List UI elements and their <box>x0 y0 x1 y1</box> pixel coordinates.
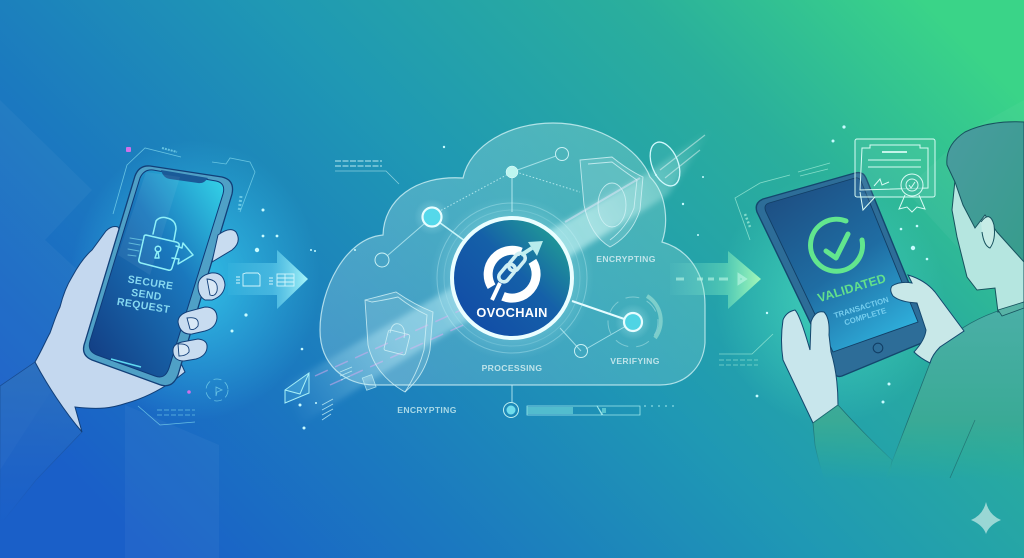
icon: certificate <box>855 139 935 212</box>
text: cloud labels: ENCRYPTING <box>596 254 656 264</box>
magenta accent dots <box>126 147 191 394</box>
home indicator <box>111 359 141 367</box>
panel: tablet <box>756 173 964 558</box>
fingernails <box>178 279 217 356</box>
icon: document <box>269 274 294 286</box>
collar <box>998 302 1024 316</box>
icon: right shield <box>580 157 643 247</box>
data beam <box>285 128 712 425</box>
HUD text lines above cloud <box>335 161 399 184</box>
icon: envelope <box>285 373 309 403</box>
node: left small <box>375 253 389 267</box>
node: verifying <box>608 296 661 347</box>
node: lower small <box>574 344 588 358</box>
sparkles <box>230 125 928 430</box>
node: top right small <box>556 148 568 160</box>
phone notch <box>161 170 208 183</box>
floating documents in beam <box>322 367 376 420</box>
validated arrow <box>670 251 761 309</box>
text: secure send request <box>116 273 174 316</box>
tablet HUD decoration <box>719 163 830 365</box>
back seam <box>950 420 975 478</box>
hair <box>947 122 1024 262</box>
tablet body <box>756 173 929 376</box>
phone body <box>84 166 233 386</box>
hub disc <box>452 218 572 338</box>
progress bar widget <box>504 402 676 418</box>
neck and face <box>952 180 1024 312</box>
fingers <box>173 230 238 361</box>
text: transaction complete: TRANSACTION <box>833 295 890 320</box>
text: ovochain: OVOCHAIN <box>476 305 548 320</box>
icon: portal ring <box>644 138 686 190</box>
panel: sender hand and phone <box>0 166 238 525</box>
tablet screen <box>765 178 918 352</box>
ear <box>981 217 994 248</box>
node: top center <box>506 166 518 178</box>
glow behind phone <box>70 140 320 420</box>
central hub <box>430 196 594 360</box>
hand palm <box>35 226 185 432</box>
panel: cloud <box>285 123 712 425</box>
send arrow <box>228 250 308 309</box>
home button <box>873 343 883 353</box>
text: validated: VALIDATED <box>816 271 888 305</box>
text: encrypting lower left: ENCRYPTING <box>397 405 457 415</box>
icon: ovochain logo <box>488 241 543 300</box>
left hand <box>782 310 838 423</box>
text: cloud labels: PROCESSING <box>482 363 542 373</box>
network lines <box>387 156 633 402</box>
text: cloud labels <box>482 254 660 373</box>
hub glow <box>430 196 594 360</box>
icon: lock with send arrow <box>128 217 193 270</box>
panel: person back <box>870 122 1024 558</box>
phone HUD decoration <box>113 148 255 425</box>
icon: corner sparkle <box>971 502 1001 534</box>
node: top left <box>414 199 450 235</box>
right hand <box>891 275 964 363</box>
text: secure send request: SEND <box>130 287 163 303</box>
torso <box>870 302 1024 558</box>
screen sheen <box>118 172 180 275</box>
left sleeve <box>813 405 892 558</box>
text: secure send request: SECURE <box>127 273 174 293</box>
icon: folder <box>236 273 260 286</box>
text: cloud labels: VERIFYING <box>610 356 660 366</box>
text: secure send request: REQUEST <box>116 296 171 316</box>
cloud shape <box>320 123 705 385</box>
arrow data marks <box>676 275 745 283</box>
glow behind tablet <box>715 175 945 425</box>
phone screen <box>89 170 224 377</box>
icon: validated check <box>811 219 863 271</box>
text: transaction complete: COMPLETE <box>843 306 887 327</box>
sleeve <box>0 362 82 525</box>
icon: left shield with lock <box>365 292 433 392</box>
